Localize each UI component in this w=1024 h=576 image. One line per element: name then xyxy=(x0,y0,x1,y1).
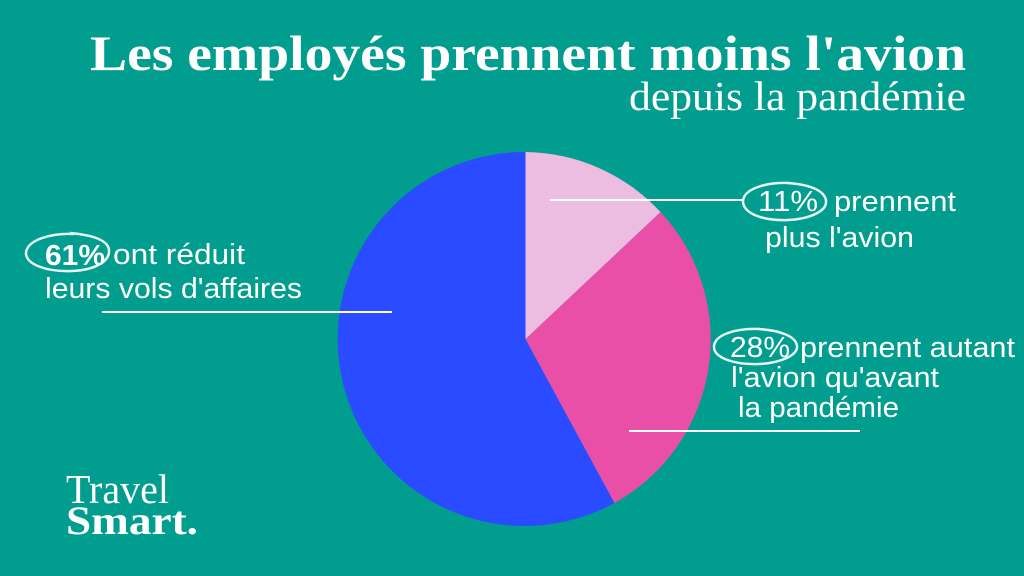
slice: 61% reduced flights xyxy=(338,152,614,526)
slice: 11% fly more xyxy=(526,152,660,339)
leader line: 28% xyxy=(629,430,860,432)
text: l'avion qu'avant: l'avion qu'avant xyxy=(731,362,939,394)
pie chart xyxy=(338,152,711,526)
slice: 28% same as before xyxy=(526,212,711,503)
value: 11%: 11% xyxy=(758,186,818,218)
leader line: 61% xyxy=(102,311,392,313)
hand-drawn circle: 28% xyxy=(714,329,797,364)
logo word: Travel: Travel xyxy=(66,466,169,512)
text: prennent: prennent xyxy=(834,186,956,218)
value: 28%: 28% xyxy=(730,332,790,364)
callout: 11% xyxy=(743,183,956,254)
hand-drawn circle: 61% xyxy=(26,233,109,271)
title: Les employés prennent moins l'avion xyxy=(90,25,966,81)
text: prennent autant: prennent autant xyxy=(800,332,1015,364)
text: la pandémie: la pandémie xyxy=(738,392,899,424)
text: leurs vols d'affaires: leurs vols d'affaires xyxy=(45,273,302,305)
value: 61%: 61% xyxy=(45,240,105,272)
leader line: 11% xyxy=(550,199,742,201)
hand-drawn circle: 11% xyxy=(743,183,826,220)
callout: 61% xyxy=(26,233,302,305)
text: ont réduit: ont réduit xyxy=(113,239,245,271)
subtitle: depuis la pandémie xyxy=(629,73,966,119)
logo word: Smart.: Smart. xyxy=(66,498,198,543)
callout: 28% xyxy=(714,329,1015,424)
logo: Travel Smart xyxy=(66,466,198,543)
text: plus l'avion: plus l'avion xyxy=(765,222,914,254)
